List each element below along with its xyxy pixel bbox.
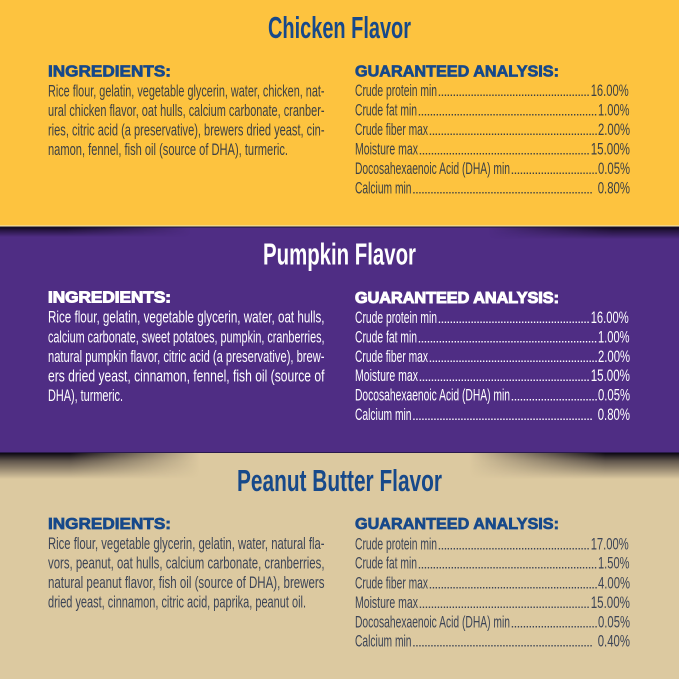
peanut butter top shadow xyxy=(0,453,679,479)
analysis table: 15.00% xyxy=(591,366,630,385)
analysis table: Crude fat min xyxy=(355,328,417,347)
analysis table xyxy=(355,308,630,424)
analysis table: 1.00% xyxy=(598,328,630,347)
ingredients text xyxy=(48,82,324,159)
ingredients text: DHA), turmeric. xyxy=(48,386,123,405)
ingredients text: dried yeast, cinnamon, citric acid, paprika, peanut oil. xyxy=(48,593,306,612)
ingredients text xyxy=(48,308,325,405)
analysis table: ......................................................... xyxy=(418,368,590,384)
analysis table: Moisture max xyxy=(355,366,418,385)
dark seam line xyxy=(0,452,679,453)
analysis table: 15.00% xyxy=(591,140,630,158)
analysis table: 0.05% xyxy=(598,612,630,631)
analysis table: 0.05% xyxy=(598,386,630,404)
analysis table: ............................................................ xyxy=(412,180,593,196)
analysis table xyxy=(355,534,630,651)
ingredients text: natural peanut flavor, fish oil (source of DHA), brewers xyxy=(48,573,324,592)
ingredients text: namon, fennel, fish oil (source of DHA), turmeric. xyxy=(48,140,288,159)
dark seam line xyxy=(0,226,679,228)
analysis table: ......................................................... xyxy=(418,595,590,611)
analysis table: Docosahexaenoic Acid (DHA) min xyxy=(355,386,510,404)
analysis table: Crude fat min xyxy=(355,554,417,573)
analysis table: Crude protein min xyxy=(355,534,437,553)
analysis table: 16.00% xyxy=(591,81,629,100)
analysis table: ............................. xyxy=(510,614,598,630)
analysis table: 4.00% xyxy=(598,573,630,592)
guaranteed analysis block xyxy=(355,516,630,651)
analysis table: ................................................... xyxy=(438,83,590,99)
analysis table: Crude fat min xyxy=(355,100,417,120)
analysis table: ................................................... xyxy=(438,536,590,552)
analysis table: ......................................................... xyxy=(428,575,598,591)
analysis table: ................................................... xyxy=(438,310,590,326)
analysis table: Crude protein min xyxy=(355,308,437,327)
ingredients text xyxy=(48,534,324,612)
analysis table: ............................................................ xyxy=(412,407,593,423)
analysis table: Calcium min xyxy=(355,178,412,198)
analysis table: 1.00% xyxy=(598,100,630,120)
analysis table: ............................................................ xyxy=(418,556,598,572)
guaranteed analysis heading: GUARANTEED ANALYSIS: xyxy=(355,64,559,80)
ingredients heading: INGREDIENTS: xyxy=(48,516,171,533)
analysis table: ............................................................ xyxy=(412,634,593,650)
peanut butter panel background xyxy=(0,452,679,679)
analysis table: Moisture max xyxy=(355,593,418,612)
analysis table: 1.50% xyxy=(598,554,630,573)
analysis table: ............................................................ xyxy=(418,330,598,346)
analysis table: Crude fiber max xyxy=(355,120,428,139)
chicken panel background xyxy=(0,0,679,226)
guaranteed analysis block xyxy=(355,64,630,198)
guaranteed analysis block xyxy=(355,290,630,424)
pumpkin panel background xyxy=(0,226,679,453)
panel: peanut butter flavor xyxy=(0,452,679,646)
analysis table: Crude protein min xyxy=(355,81,437,100)
heading: peanut butter flavor: Peanut Butter Flavor xyxy=(237,463,442,498)
analysis table xyxy=(355,81,630,198)
ingredients text: ries, citric acid (a preservative), brewers dried yeast, cin- xyxy=(48,120,324,140)
yellow panel edge line xyxy=(0,225,679,226)
analysis table: ............................. xyxy=(510,388,598,404)
analysis table: ......................................................... xyxy=(428,122,598,138)
analysis table: Docosahexaenoic Acid (DHA) min xyxy=(355,159,510,178)
analysis table: ......................................................... xyxy=(428,349,598,365)
analysis table: ......................................................... xyxy=(418,142,590,158)
analysis table: 17.00% xyxy=(591,534,629,553)
analysis table: 2.00% xyxy=(598,120,630,139)
analysis table: 0.80% xyxy=(598,405,630,424)
ingredients block xyxy=(48,64,324,159)
analysis table: Calcium min xyxy=(355,632,412,651)
analysis table: Calcium min xyxy=(355,405,412,424)
analysis table: Crude fiber max xyxy=(355,347,428,366)
analysis table: 15.00% xyxy=(591,593,630,612)
ingredients text: Rice flour, vegetable glycerin, gelatin, water, natural fla- xyxy=(48,534,324,553)
guaranteed analysis heading: GUARANTEED ANALYSIS: xyxy=(355,516,559,533)
ingredients text: ural chicken flavor, oat hulls, calcium carbonate, cranber- xyxy=(48,101,324,120)
analysis table: 16.00% xyxy=(591,308,629,327)
analysis table: ............................. xyxy=(510,161,598,177)
analysis table: 0.80% xyxy=(598,178,630,198)
ingredients heading: INGREDIENTS: xyxy=(48,290,171,307)
analysis table: Docosahexaenoic Acid (DHA) min xyxy=(355,612,510,631)
analysis table: 0.05% xyxy=(598,159,630,178)
pumpkin top shadow xyxy=(0,228,679,238)
panel: pumpkin flavor xyxy=(0,225,679,453)
ingredients text: natural pumpkin flavor, citric acid (a preservative), brew- xyxy=(48,347,324,366)
ingredients text: vors, peanut, oat hulls, calcium carbonate, cranberries, xyxy=(48,554,324,573)
ingredients text: calcium carbonate, sweet potatoes, pumpkin, cranberries, xyxy=(48,327,324,346)
heading: pumpkin flavor: Pumpkin Flavor xyxy=(263,236,416,272)
ingredients block xyxy=(48,516,324,612)
ingredients heading: INGREDIENTS: xyxy=(48,64,171,80)
analysis table: Crude fiber max xyxy=(355,573,428,592)
analysis table: 2.00% xyxy=(598,347,630,366)
analysis table: Moisture max xyxy=(355,140,418,158)
ingredients text: Rice flour, gelatin, vegetable glycerin, water, chicken, nat- xyxy=(48,82,324,100)
heading: chicken flavor: Chicken Flavor xyxy=(268,10,411,45)
ingredients text: ers dried yeast, cinnamon, fennel, fish oil (source of xyxy=(48,366,325,385)
guaranteed analysis heading: GUARANTEED ANALYSIS: xyxy=(355,290,559,307)
analysis table: 0.40% xyxy=(598,632,630,651)
panel: chicken flavor xyxy=(0,0,679,226)
analysis table: ............................................................ xyxy=(418,102,598,118)
ingredients text: Rice flour, gelatin, vegetable glycerin, water, oat hulls, xyxy=(48,308,324,327)
ingredients block xyxy=(48,290,325,405)
